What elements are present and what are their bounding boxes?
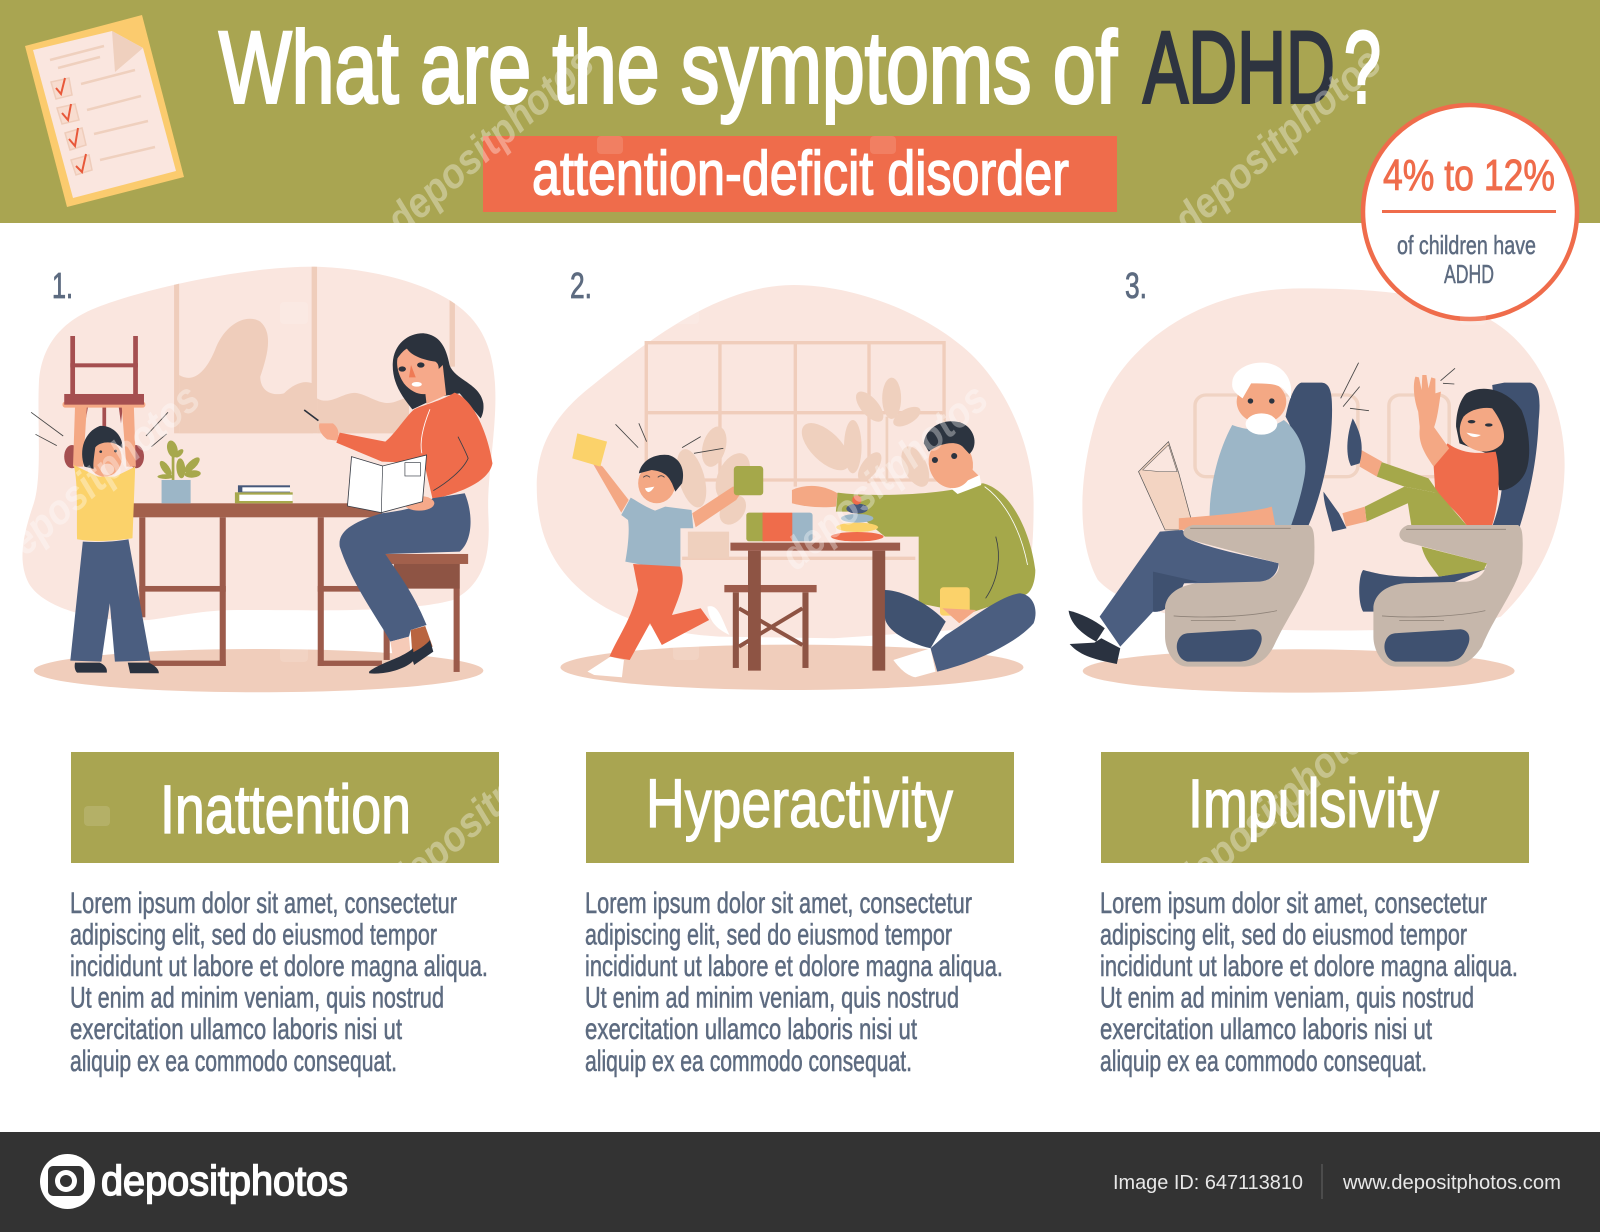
- illustration 3: girl kicking seat on airplane: [1069, 288, 1565, 693]
- stat circle: [1363, 105, 1577, 319]
- column 2 text: Ut enim ad minim veniam, quis nostrud: [585, 982, 959, 1014]
- building blocks: [746, 513, 813, 541]
- column 3 banner: [1101, 752, 1529, 863]
- floor ellipse: [34, 649, 483, 692]
- house plants: [671, 378, 935, 558]
- column 3 text: exercitation ullamco laboris nisi ut: [1100, 1013, 1432, 1046]
- column 3 text: aliquip ex ea commodo consequat.: [1100, 1045, 1427, 1078]
- elderly man with newspaper: [1069, 363, 1305, 664]
- column 2 text: incididunt ut labore et dolore magna aliqua.: [585, 950, 1003, 983]
- background blob: [537, 285, 1034, 638]
- number 1: 1.: [52, 265, 73, 306]
- column 2 banner: Hyperactivity: [646, 765, 953, 842]
- motion lines: [1341, 363, 1455, 411]
- column 1 text: incididunt ut labore et dolore magna aliqua.: [70, 950, 488, 983]
- column 1 text: exercitation ullamco laboris nisi ut: [70, 1013, 402, 1046]
- website url: www.depositphotos.com: [1342, 1171, 1561, 1194]
- stock watermarks: depositphotos: [378, 701, 604, 906]
- seat backs: [1286, 383, 1540, 527]
- illustration 1: child lifting chair, teacher with book: [22, 263, 495, 692]
- background blob: [22, 267, 495, 620]
- stat circle: ADHD: [1444, 259, 1494, 289]
- column 2 text: [585, 887, 1003, 1078]
- column 1 text: adipiscing elit, sed do eiusmod tempor: [70, 918, 437, 952]
- number 3: 3.: [1125, 265, 1147, 306]
- illustration 2: child running with blocks, father at table: [537, 285, 1036, 690]
- column 1 text: [70, 887, 488, 1078]
- table and bench: [724, 543, 900, 671]
- logo: depositphotos: depositphotos: [101, 1157, 348, 1204]
- column 1 text: Ut enim ad minim veniam, quis nostrud: [70, 982, 444, 1014]
- column 1 banner: [71, 752, 499, 863]
- stock watermarks: depositphotos: [1164, 38, 1390, 243]
- column 2 text: adipiscing elit, sed do eiusmod tempor: [585, 918, 952, 952]
- subtitle banner: attention-deficit disorder: [532, 140, 1069, 208]
- window grid: [646, 343, 944, 558]
- column 1 text: Lorem ipsum dolor sit amet, consectetur: [70, 887, 457, 920]
- stock watermarks: depositphotos: [377, 38, 603, 243]
- stacking toy: [831, 495, 884, 541]
- seat 2 body: [1359, 525, 1523, 667]
- teacher with book and pointer: [304, 333, 492, 674]
- column 3 banner: Impulsivity: [1188, 765, 1439, 842]
- cabin windows: [1195, 395, 1449, 477]
- background blob: [1082, 288, 1565, 630]
- father sitting on floor: [792, 421, 1036, 677]
- stat circle: 4% to 12%: [1383, 151, 1555, 200]
- title: ?: [1344, 10, 1381, 124]
- child holding chair: [31, 336, 168, 673]
- image id: Image ID: 647113810: [1113, 1171, 1303, 1194]
- icon: checklist document: [25, 15, 184, 207]
- stock watermarks: depositphotos: [771, 374, 997, 579]
- title: ADHD: [1143, 10, 1335, 124]
- title: What are the symptoms of: [219, 10, 1117, 124]
- desk: [133, 503, 382, 666]
- stool: [384, 554, 468, 672]
- column 1 text: aliquip ex ea commodo consequat.: [70, 1045, 397, 1078]
- stat circle: of children have: [1397, 230, 1536, 260]
- stock watermarks: [0, 38, 1600, 906]
- logo: depositphotos: [40, 1154, 348, 1209]
- number 2: 2.: [570, 265, 592, 306]
- column 3 text: [1100, 887, 1518, 1078]
- column 2 text: exercitation ullamco laboris nisi ut: [585, 1013, 917, 1046]
- column 3 text: adipiscing elit, sed do eiusmod tempor: [1100, 918, 1467, 952]
- floor ellipse: [1083, 649, 1515, 693]
- column 2 text: Lorem ipsum dolor sit amet, consectetur: [585, 887, 972, 920]
- seat 1 body: [1165, 525, 1314, 667]
- column 2 banner: [586, 752, 1014, 863]
- footer bar: [0, 1132, 1600, 1232]
- column 1 banner: Inattention: [160, 771, 411, 848]
- books: [235, 485, 293, 503]
- column 2 text: aliquip ex ea commodo consequat.: [585, 1045, 912, 1078]
- plant: [158, 439, 202, 503]
- stock watermarks: depositphotos: [1164, 701, 1390, 906]
- floor ellipse: [560, 645, 1023, 690]
- window with landscape: [174, 263, 455, 433]
- header band: [0, 0, 1600, 223]
- running child: [572, 423, 763, 677]
- girl kicking seat: [1323, 375, 1529, 532]
